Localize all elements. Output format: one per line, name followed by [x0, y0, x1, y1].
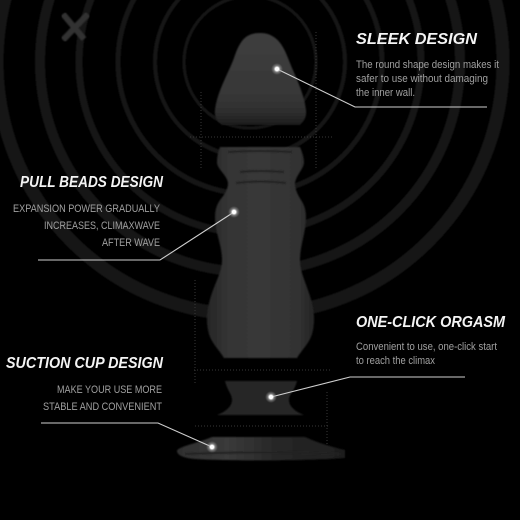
marker dot	[271, 63, 283, 75]
heading: SLEEK DESIGN	[356, 31, 478, 48]
marker dot	[206, 441, 218, 453]
ridge shading	[185, 151, 340, 454]
description: Convenient to use, one-click start	[356, 341, 497, 353]
description: STABLE AND CONVENIENT	[43, 401, 162, 413]
leader line	[271, 377, 465, 397]
callout: pull beads design	[13, 174, 240, 260]
description	[43, 384, 162, 413]
description: MAKE YOUR USE MORE	[57, 384, 162, 396]
leader line	[41, 423, 212, 447]
concentric rings	[0, 0, 503, 315]
heading: SUCTION CUP DESIGN	[6, 355, 164, 372]
leader line	[277, 69, 487, 107]
description: INCREASES, CLIMAXWAVE	[44, 220, 160, 232]
middle section with beads	[207, 147, 314, 358]
description: to reach the climax	[356, 355, 436, 367]
tip section	[215, 33, 306, 125]
dotted guides	[190, 32, 332, 450]
leader line	[38, 212, 234, 260]
description: AFTER WAVE	[102, 237, 160, 249]
marker dot	[265, 391, 277, 403]
product	[177, 33, 345, 460]
marker dot	[228, 206, 240, 218]
callout: sleek design	[271, 31, 499, 107]
button section	[217, 381, 304, 415]
description: EXPANSION POWER GRADUALLY	[13, 203, 160, 215]
description: safer to use without damaging	[356, 73, 488, 85]
description	[356, 59, 499, 99]
description	[13, 203, 160, 249]
description: the inner wall.	[356, 87, 415, 99]
description: The round shape design makes it	[356, 59, 499, 71]
heading: PULL BEADS DESIGN	[20, 174, 164, 191]
description	[356, 341, 497, 367]
callout: one-click orgasm	[265, 314, 506, 403]
callout: suction cup design	[6, 355, 218, 453]
base	[177, 437, 345, 460]
icon: close mark	[63, 14, 88, 40]
heading: ONE-CLICK ORGASM	[356, 314, 506, 331]
